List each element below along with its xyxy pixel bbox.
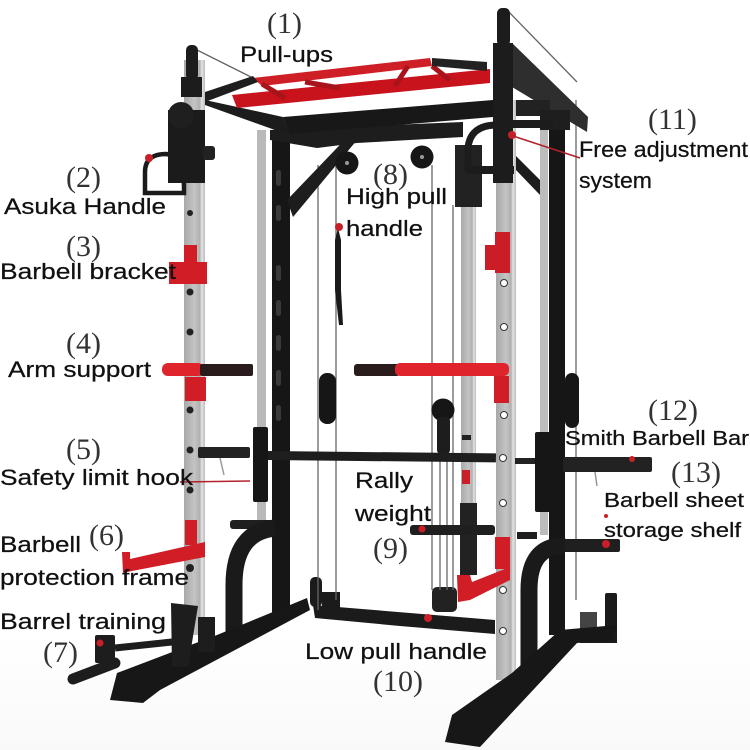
labels: system — [579, 168, 652, 193]
right top block and pulley — [466, 8, 553, 183]
labels: handle — [346, 216, 423, 241]
labels: weight — [354, 501, 431, 526]
strut — [287, 127, 367, 217]
labels: (11) — [648, 103, 697, 136]
labels: Low pull handle — [305, 639, 487, 664]
labels: (7) — [43, 636, 78, 669]
labels: storage shelf — [604, 520, 742, 542]
labels: Safety limit hook — [0, 465, 194, 490]
left arm — [205, 76, 258, 102]
right bracket — [485, 232, 510, 273]
lower red bar — [232, 69, 490, 108]
labels: (10) — [373, 665, 423, 698]
pointer lines — [180, 135, 580, 482]
labels: Barbell — [0, 532, 81, 557]
labels: Arm support — [8, 357, 151, 382]
red dots — [96, 131, 610, 646]
labels: (9) — [373, 532, 408, 565]
labels: (12) — [648, 394, 698, 427]
labels: (3) — [66, 230, 101, 263]
black grip — [432, 58, 487, 71]
barrel training — [73, 603, 215, 679]
machine illustration — [73, 8, 652, 747]
labels: Smith Barbell Bar — [565, 428, 749, 450]
left top block and pulley — [181, 45, 202, 97]
curved supports — [234, 528, 565, 680]
main beam — [283, 100, 493, 134]
labels: Free adjustment — [579, 137, 748, 162]
right top beam — [512, 43, 588, 132]
right front upright — [496, 100, 516, 680]
plate storage shelf — [230, 520, 620, 552]
cables — [197, 10, 577, 610]
labels: Barbell sheet — [604, 490, 745, 512]
labels: (13) — [671, 456, 721, 489]
left front upright — [184, 60, 205, 635]
labels: (6) — [89, 519, 124, 552]
labels: (1) — [267, 7, 302, 40]
center post details — [455, 145, 482, 575]
rear silver columns — [257, 130, 266, 530]
left side beam — [205, 100, 290, 133]
top frame — [205, 43, 588, 217]
pulleys and handles — [319, 146, 579, 454]
rear beam — [270, 122, 463, 148]
base — [110, 598, 617, 747]
labels: protection frame — [0, 565, 189, 590]
right arm support — [354, 363, 509, 403]
labels: Barrel training — [0, 609, 166, 634]
labels: (8) — [373, 158, 408, 191]
left pulley and handle — [145, 102, 215, 193]
left protection frame — [122, 520, 205, 573]
red upper rail — [253, 58, 432, 86]
rear base — [310, 577, 617, 643]
left arm support — [162, 363, 253, 401]
labels: (2) — [66, 161, 101, 194]
labels: Rally — [355, 468, 413, 493]
labels: High pull — [346, 184, 447, 209]
labels: Asuka Handle — [4, 194, 166, 219]
floor shading — [0, 630, 750, 750]
labels: (5) — [66, 433, 101, 466]
right protection frame — [457, 537, 510, 602]
labels: Barbell bracket — [0, 259, 176, 284]
labels: (4) — [66, 327, 101, 360]
smith bar — [198, 427, 652, 512]
labels: Pull-ups — [240, 42, 333, 67]
rear black columns — [272, 105, 565, 635]
red cross handles — [262, 66, 450, 98]
left barbell bracket — [169, 245, 207, 284]
